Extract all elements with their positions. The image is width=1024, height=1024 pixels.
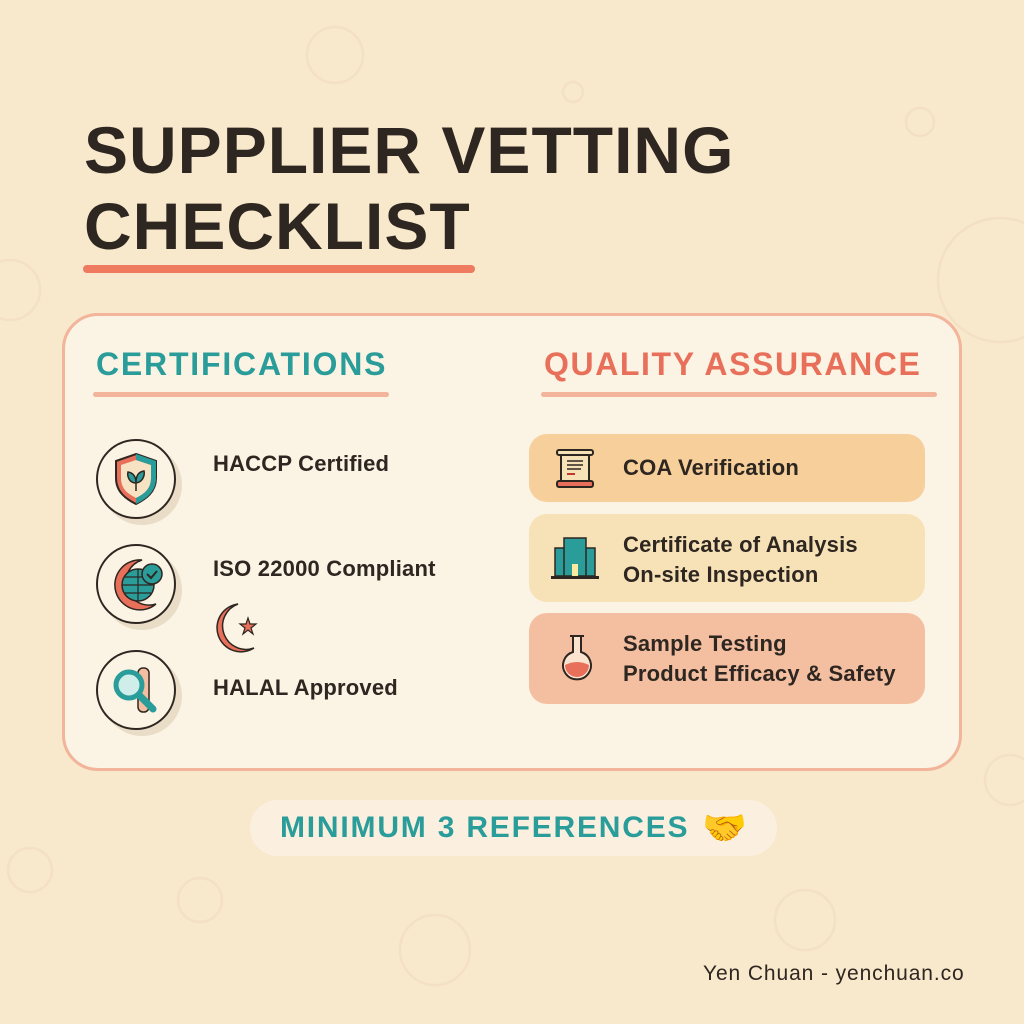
panel: main xyxy=(62,313,962,771)
item: HALAL: HALAL Approved xyxy=(213,675,398,700)
heading underline QA xyxy=(541,392,937,397)
card: sample testing: Product Efficacy & Safety xyxy=(623,661,896,686)
callout: minimum references: MINIMUM 3 REFERENCES xyxy=(280,811,689,844)
item: HALAL xyxy=(96,650,398,736)
item: HACCP: HACCP Certified xyxy=(213,451,389,476)
icon: crescent star xyxy=(216,603,258,653)
callout: minimum references xyxy=(250,800,777,856)
item: ISO 22000: ISO 22000 Compliant xyxy=(213,556,436,581)
card: sample testing: Sample Testing xyxy=(623,631,787,656)
card: COA xyxy=(529,434,925,502)
card: on-site inspection: Certificate of Analysis xyxy=(623,532,858,557)
title xyxy=(84,113,734,263)
icon: shield xyxy=(96,439,176,519)
item: HACCP xyxy=(96,439,389,525)
title: SUPPLIER VETTING xyxy=(84,113,734,187)
heading: quality assurance: QUALITY ASSURANCE xyxy=(544,346,921,382)
icon: handshake: 🤝 xyxy=(702,807,747,848)
card: on-site inspection xyxy=(529,514,925,602)
icon: flask xyxy=(562,635,592,680)
card: sample testing xyxy=(529,613,925,704)
icon: magnifier xyxy=(96,650,176,730)
heading: certifications: CERTIFICATIONS xyxy=(96,346,387,382)
footer credit: Yen Chuan - yenchuan.co xyxy=(703,962,965,985)
icon: building xyxy=(551,537,599,579)
item: ISO 22000 xyxy=(96,544,436,630)
icon: scroll xyxy=(556,449,594,488)
card: on-site inspection: On-site Inspection xyxy=(623,562,819,587)
card: COA: COA Verification xyxy=(623,455,799,480)
title underline xyxy=(83,265,475,273)
heading underline certifications xyxy=(93,392,389,397)
title: CHECKLIST xyxy=(84,189,471,263)
icon: globe check xyxy=(96,544,176,624)
